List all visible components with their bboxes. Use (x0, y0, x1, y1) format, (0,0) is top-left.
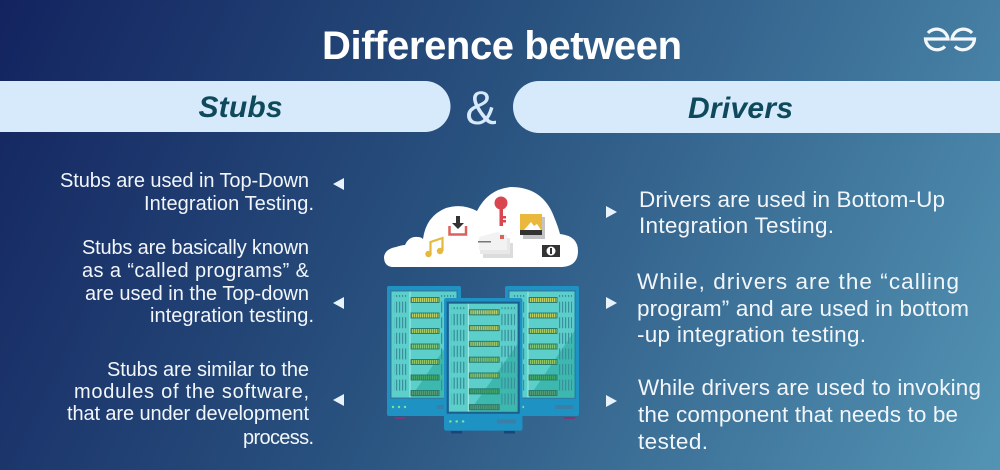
icon: cloud with files (384, 187, 578, 267)
illustration: server racks (387, 286, 579, 434)
text block: drivers point 2: program” and are used in bottom (637, 296, 969, 321)
text block: drivers point 1 (639, 187, 945, 238)
ampersand: & (465, 81, 497, 134)
icon: key (494, 196, 508, 226)
icon: download tray (450, 216, 466, 234)
text block: drivers point 1: Integration Testing. (639, 213, 834, 238)
text block: stubs point 2: integration testing. (150, 305, 314, 327)
icon: envelopes (478, 232, 513, 258)
text block: stubs point 3: process. (243, 427, 314, 449)
text block: stubs point 1 (60, 170, 314, 215)
text block: stubs point 1: Stubs are used in Top-Down (60, 170, 309, 192)
icon: logo (926, 29, 974, 50)
text block: drivers point 1: Drivers are used in Bottom-Up (639, 187, 945, 212)
panel: stubs heading: Stubs (198, 91, 282, 124)
panel: drivers heading (513, 81, 1000, 133)
text block: drivers point 2: -up integration testing. (637, 322, 866, 347)
text block: stubs point 1: Integration Testing. (144, 193, 314, 215)
panel: stubs heading (0, 81, 451, 132)
arrows: right column (606, 206, 617, 407)
icon: music note (425, 238, 443, 257)
text block: stubs point 2: as a “called programs” & (82, 260, 310, 282)
text block: drivers point 2: While, drivers are the “calling (637, 269, 959, 294)
text block: stubs point 2: Stubs are basically known (82, 237, 309, 259)
text block: stubs point 3: that are under development (67, 403, 309, 425)
panel: drivers heading: Drivers (688, 92, 793, 125)
rack: left (387, 286, 461, 416)
text block: stubs point 2: are used in the Top-down (85, 283, 309, 305)
text block: drivers point 3 (638, 375, 981, 454)
icon: banknote (542, 245, 560, 257)
text block: stubs point 3: modules of the software, (74, 381, 309, 403)
arrows: left column (333, 178, 344, 406)
rack: center (444, 298, 522, 431)
text block: drivers point 3: While drivers are used to invoking (638, 375, 981, 400)
text block: stubs point 3: Stubs are similar to the (107, 359, 309, 381)
text block: stubs point 3 (67, 359, 314, 449)
rack: right (505, 286, 579, 416)
text block: drivers point 3: tested. (638, 429, 708, 454)
text block: drivers point 3: the component that needs to be (638, 402, 958, 427)
icon: picture (520, 214, 545, 239)
text block: drivers point 2 (637, 269, 969, 347)
title: Difference between (322, 24, 682, 68)
text block: stubs point 2 (82, 237, 314, 327)
